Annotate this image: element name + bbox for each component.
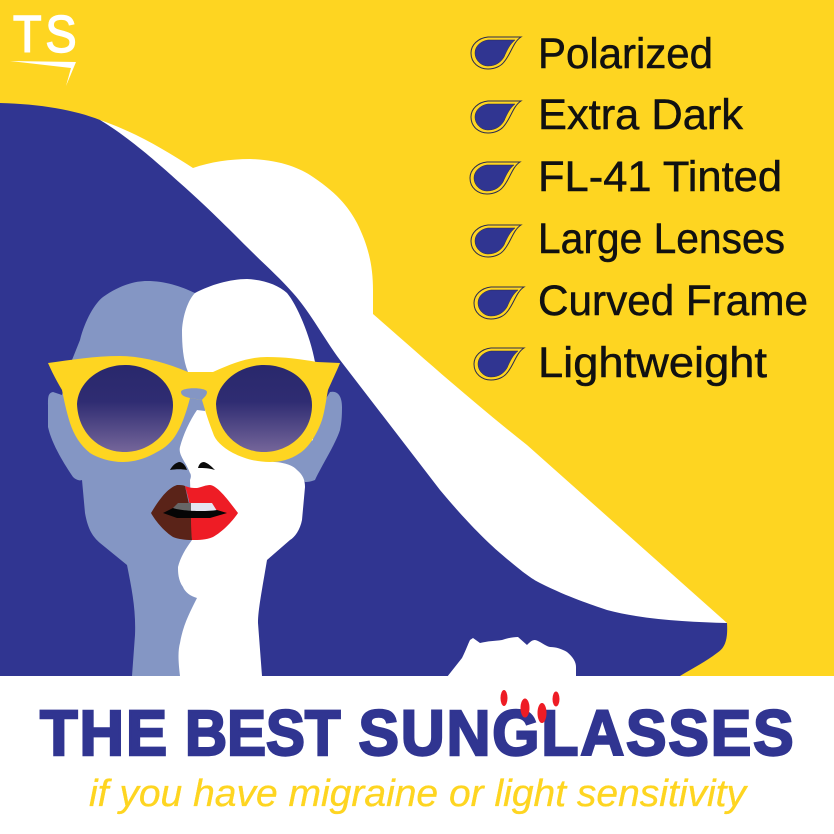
title: THE xyxy=(40,697,169,769)
fingernails xyxy=(500,690,560,723)
nose bridge opening xyxy=(181,388,207,400)
subtitle: if you have migraine or light sensitivity xyxy=(89,773,748,815)
right lens xyxy=(216,365,312,452)
hat: blue underside xyxy=(0,103,727,676)
left lens xyxy=(77,365,173,452)
title: BEST xyxy=(185,697,340,769)
teeth shadow xyxy=(173,503,191,512)
panel: title band xyxy=(0,676,834,834)
item: FL-41 Tinted: FL-41 Tinted xyxy=(538,153,782,201)
icon: lens drop xyxy=(471,37,521,69)
frame xyxy=(48,356,340,462)
item: Extra Dark: Extra Dark xyxy=(538,91,743,139)
item: Polarized: Polarized xyxy=(538,30,713,78)
logo: TS: TS xyxy=(13,6,77,64)
face shadow side xyxy=(48,281,300,676)
icon: lens drop xyxy=(474,287,524,319)
icon: lens drop xyxy=(470,162,520,194)
lips lit side xyxy=(185,485,238,540)
hand xyxy=(447,637,576,677)
item: Curved Frame: Curved Frame xyxy=(538,277,808,325)
woman portrait xyxy=(48,279,342,676)
icon: lens drop xyxy=(471,101,521,133)
lips shadow side xyxy=(151,485,192,540)
feature list xyxy=(470,30,808,387)
teeth xyxy=(191,503,217,512)
sunglasses xyxy=(48,356,340,462)
nose bridge shadow xyxy=(188,395,205,414)
item: Lightweight: Lightweight xyxy=(538,339,767,387)
icon: lens drop xyxy=(471,225,521,257)
face lit side xyxy=(178,279,315,676)
mouth xyxy=(163,508,227,518)
icon: lens drop xyxy=(474,348,524,380)
title xyxy=(40,697,796,769)
title: SUNGLASSES xyxy=(358,697,796,769)
nostrils xyxy=(170,462,215,470)
item: Large Lenses: Large Lenses xyxy=(538,215,785,263)
logo: TS xyxy=(10,6,77,86)
lips xyxy=(151,485,238,540)
hat: white crown and brim xyxy=(100,120,727,640)
right ear xyxy=(273,392,342,482)
